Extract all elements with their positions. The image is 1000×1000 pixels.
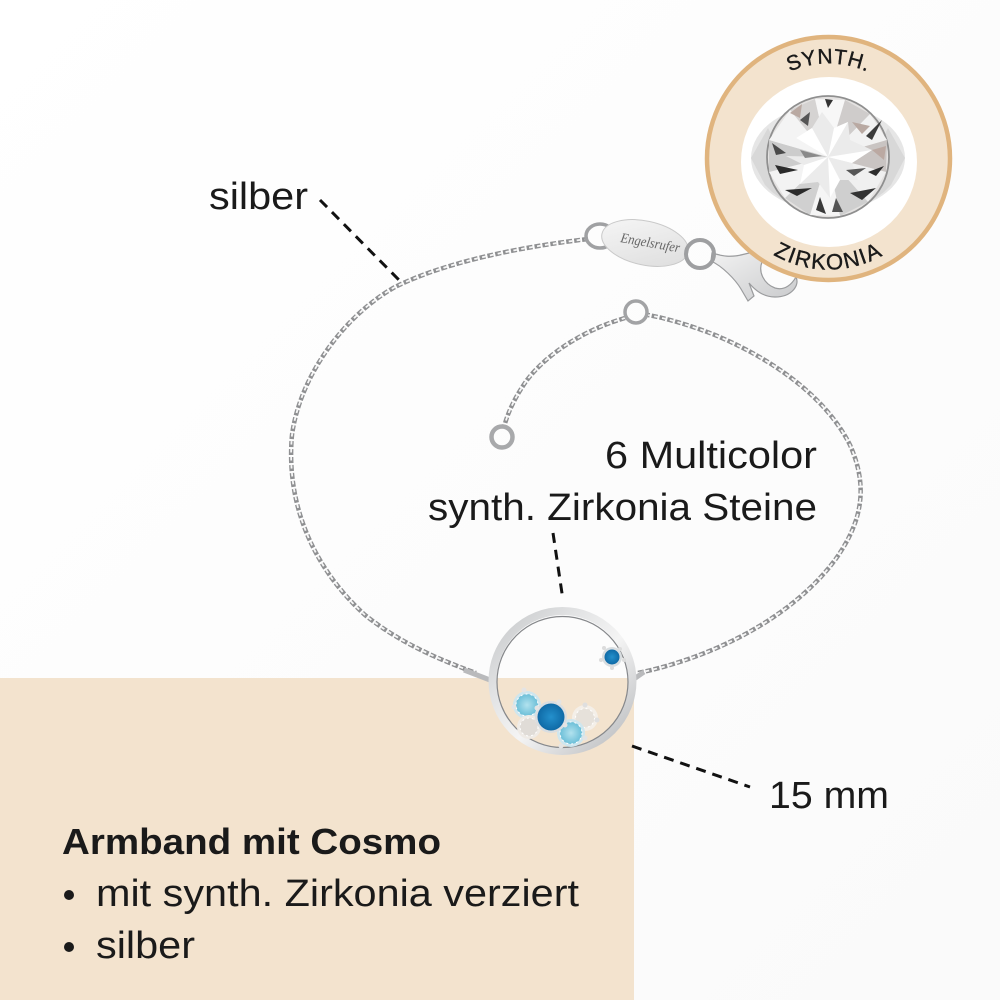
bullet 2 — [64, 942, 74, 952]
bullet 2 text: silber — [96, 925, 195, 967]
medallion: synth. Zirkonia — [704, 34, 952, 282]
medallion ring — [707, 37, 950, 280]
label: silber — [209, 176, 308, 218]
callout: stones — [428, 435, 817, 600]
callout: silber — [209, 176, 400, 281]
bracelet chain — [291, 239, 861, 673]
end ring upper — [625, 301, 647, 323]
link left — [464, 670, 490, 680]
oval tag with engraving: Engelsrufer — [618, 231, 681, 256]
heading: Armband mit Cosmo — [62, 821, 441, 862]
label: ZIRKONIA: ZIRKONIA — [773, 242, 883, 270]
bullet 1 — [64, 890, 74, 900]
stone: light blue left — [512, 688, 541, 719]
panel: product description background — [0, 678, 634, 1000]
label line 1: 6 Multicolor — [605, 435, 817, 477]
stone: white right — [572, 702, 600, 731]
bullet 1 text: mit synth. Zirkonia verziert — [96, 873, 579, 915]
dashed leader — [320, 200, 400, 281]
lobster clasp — [711, 252, 797, 301]
dashed leader — [553, 533, 563, 600]
stone: white left — [517, 715, 541, 739]
stone: small blue — [599, 646, 626, 670]
medallion white centre — [741, 77, 917, 247]
label: 15 mm — [769, 775, 889, 817]
link right — [634, 672, 644, 679]
circle ring — [492, 611, 632, 751]
dashed leader — [632, 746, 750, 787]
end ring lower — [492, 426, 512, 448]
label: SYNTH.: SYNTH. — [786, 48, 866, 72]
medallion arc paths — [734, 64, 924, 158]
tag ring right — [686, 240, 714, 268]
label line 2: synth. Zirkonia Steine — [428, 487, 817, 529]
oval tag with engraving — [597, 212, 693, 274]
stone: light blue right — [557, 719, 588, 748]
clasp — [586, 212, 797, 301]
icon: cut gemstone — [751, 96, 905, 218]
tag ring left — [586, 224, 614, 248]
stone: large blue — [534, 700, 568, 733]
pendant — [464, 611, 644, 751]
callout: 15 mm — [632, 746, 889, 817]
text block: product description — [62, 821, 579, 967]
